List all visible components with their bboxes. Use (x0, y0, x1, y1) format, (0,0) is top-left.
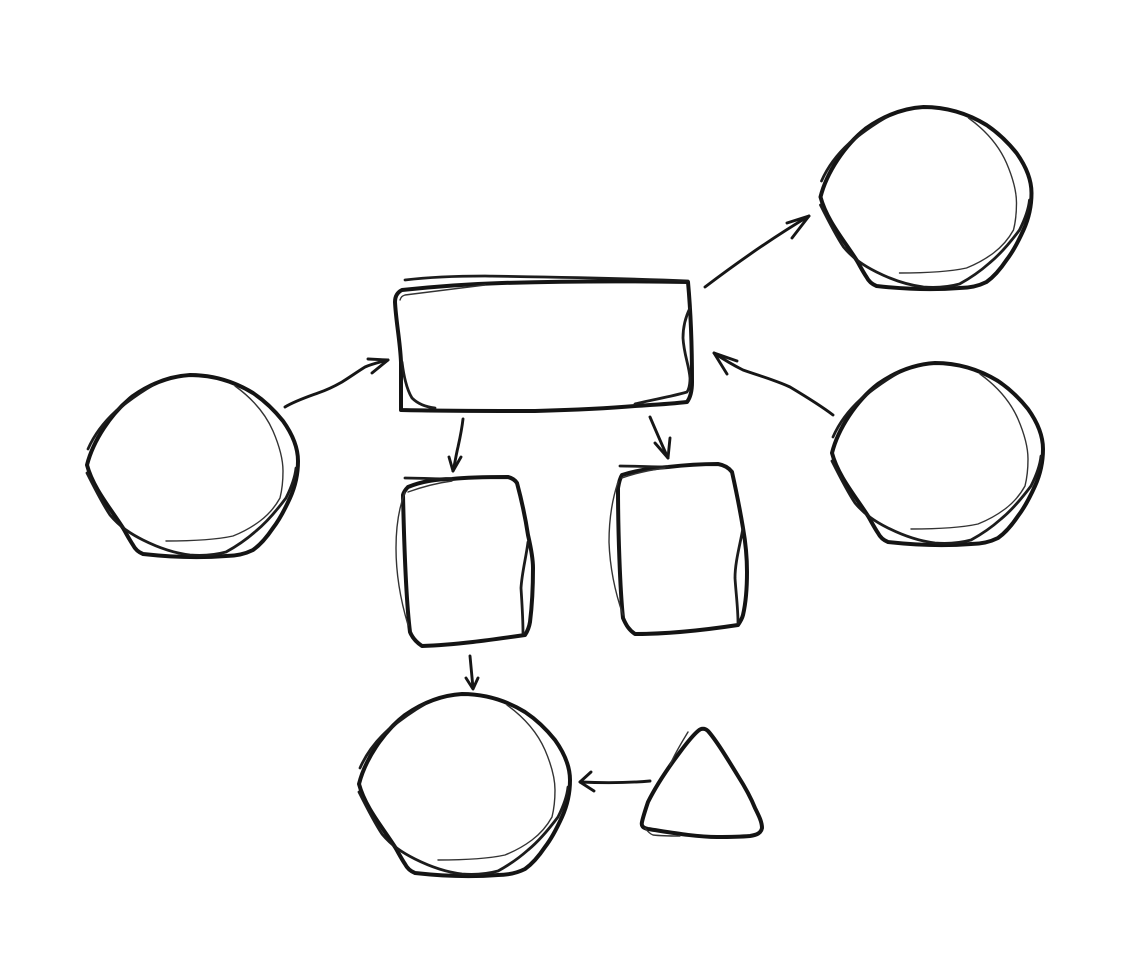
arrow: lower left rectangle to bottom circle (466, 656, 478, 689)
circle: right (832, 363, 1043, 545)
arrow: central rectangle to lower left rectangle (449, 419, 463, 471)
circle: top right (820, 107, 1032, 289)
arrow: right circle to central rectangle (714, 353, 833, 415)
arrow: central rectangle to lower right rectangle (650, 417, 670, 458)
arrow: central rectangle to top right circle (705, 216, 809, 287)
circle: bottom (359, 694, 570, 876)
arrow: left circle to central rectangle (285, 359, 388, 407)
central rectangle (395, 276, 692, 411)
lower left rectangle (396, 477, 533, 646)
arrow: triangle to bottom circle (580, 772, 650, 791)
circle: left (87, 375, 298, 557)
lower right rectangle (609, 464, 747, 634)
triangle (642, 729, 762, 837)
